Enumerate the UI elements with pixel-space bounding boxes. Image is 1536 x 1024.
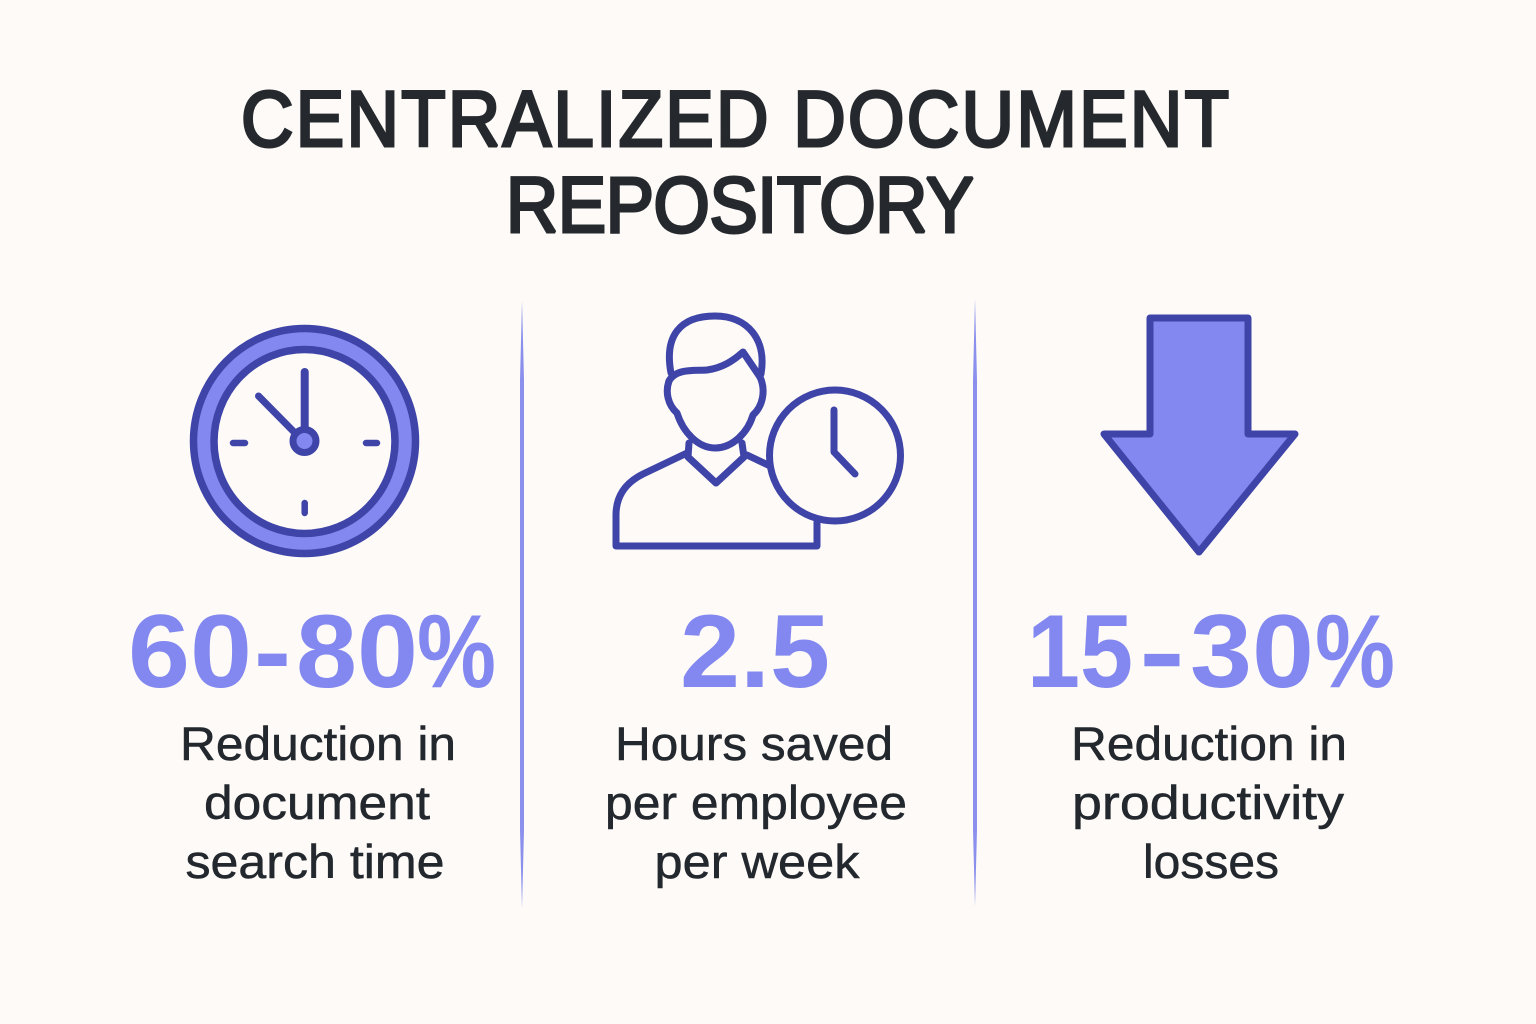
stat: 15-30%: 30 <box>1190 594 1314 710</box>
title: REPOSITORY <box>506 161 974 250</box>
icon: down arrow <box>1104 318 1295 552</box>
caption: productivity losses <box>1071 717 1347 888</box>
stat: 2.5: 2.5 <box>680 594 830 710</box>
stat: 60-80%: - <box>254 594 291 710</box>
stat: 15-30%: 15 <box>1027 594 1133 710</box>
stat: 60-80%: 60 <box>128 594 252 710</box>
caption: search time: search time <box>186 835 444 888</box>
caption: hours saved: per week <box>654 835 860 888</box>
divider left <box>520 301 524 908</box>
divider right <box>973 299 977 906</box>
caption: search time: document <box>204 776 430 829</box>
icon: person with clock <box>616 316 900 546</box>
caption: productivity losses: Reduction in <box>1071 717 1347 770</box>
stat: 60-80%: % <box>417 594 496 710</box>
stat: 15-30%: - <box>1139 594 1185 710</box>
stat: 15-30%: % <box>1315 594 1395 710</box>
caption: search time: Reduction in <box>180 717 456 770</box>
icon: clock <box>194 328 416 554</box>
caption: search time <box>180 717 456 888</box>
title <box>241 75 1229 250</box>
stat: 60-80%: 80 <box>296 594 418 710</box>
caption: productivity losses: losses <box>1143 835 1279 888</box>
caption: hours saved: Hours saved <box>615 717 893 770</box>
caption: productivity losses: productivity <box>1072 776 1345 829</box>
caption: hours saved <box>605 717 907 888</box>
title: CENTRALIZED DOCUMENT <box>241 75 1229 164</box>
caption: hours saved: per employee <box>605 776 907 829</box>
